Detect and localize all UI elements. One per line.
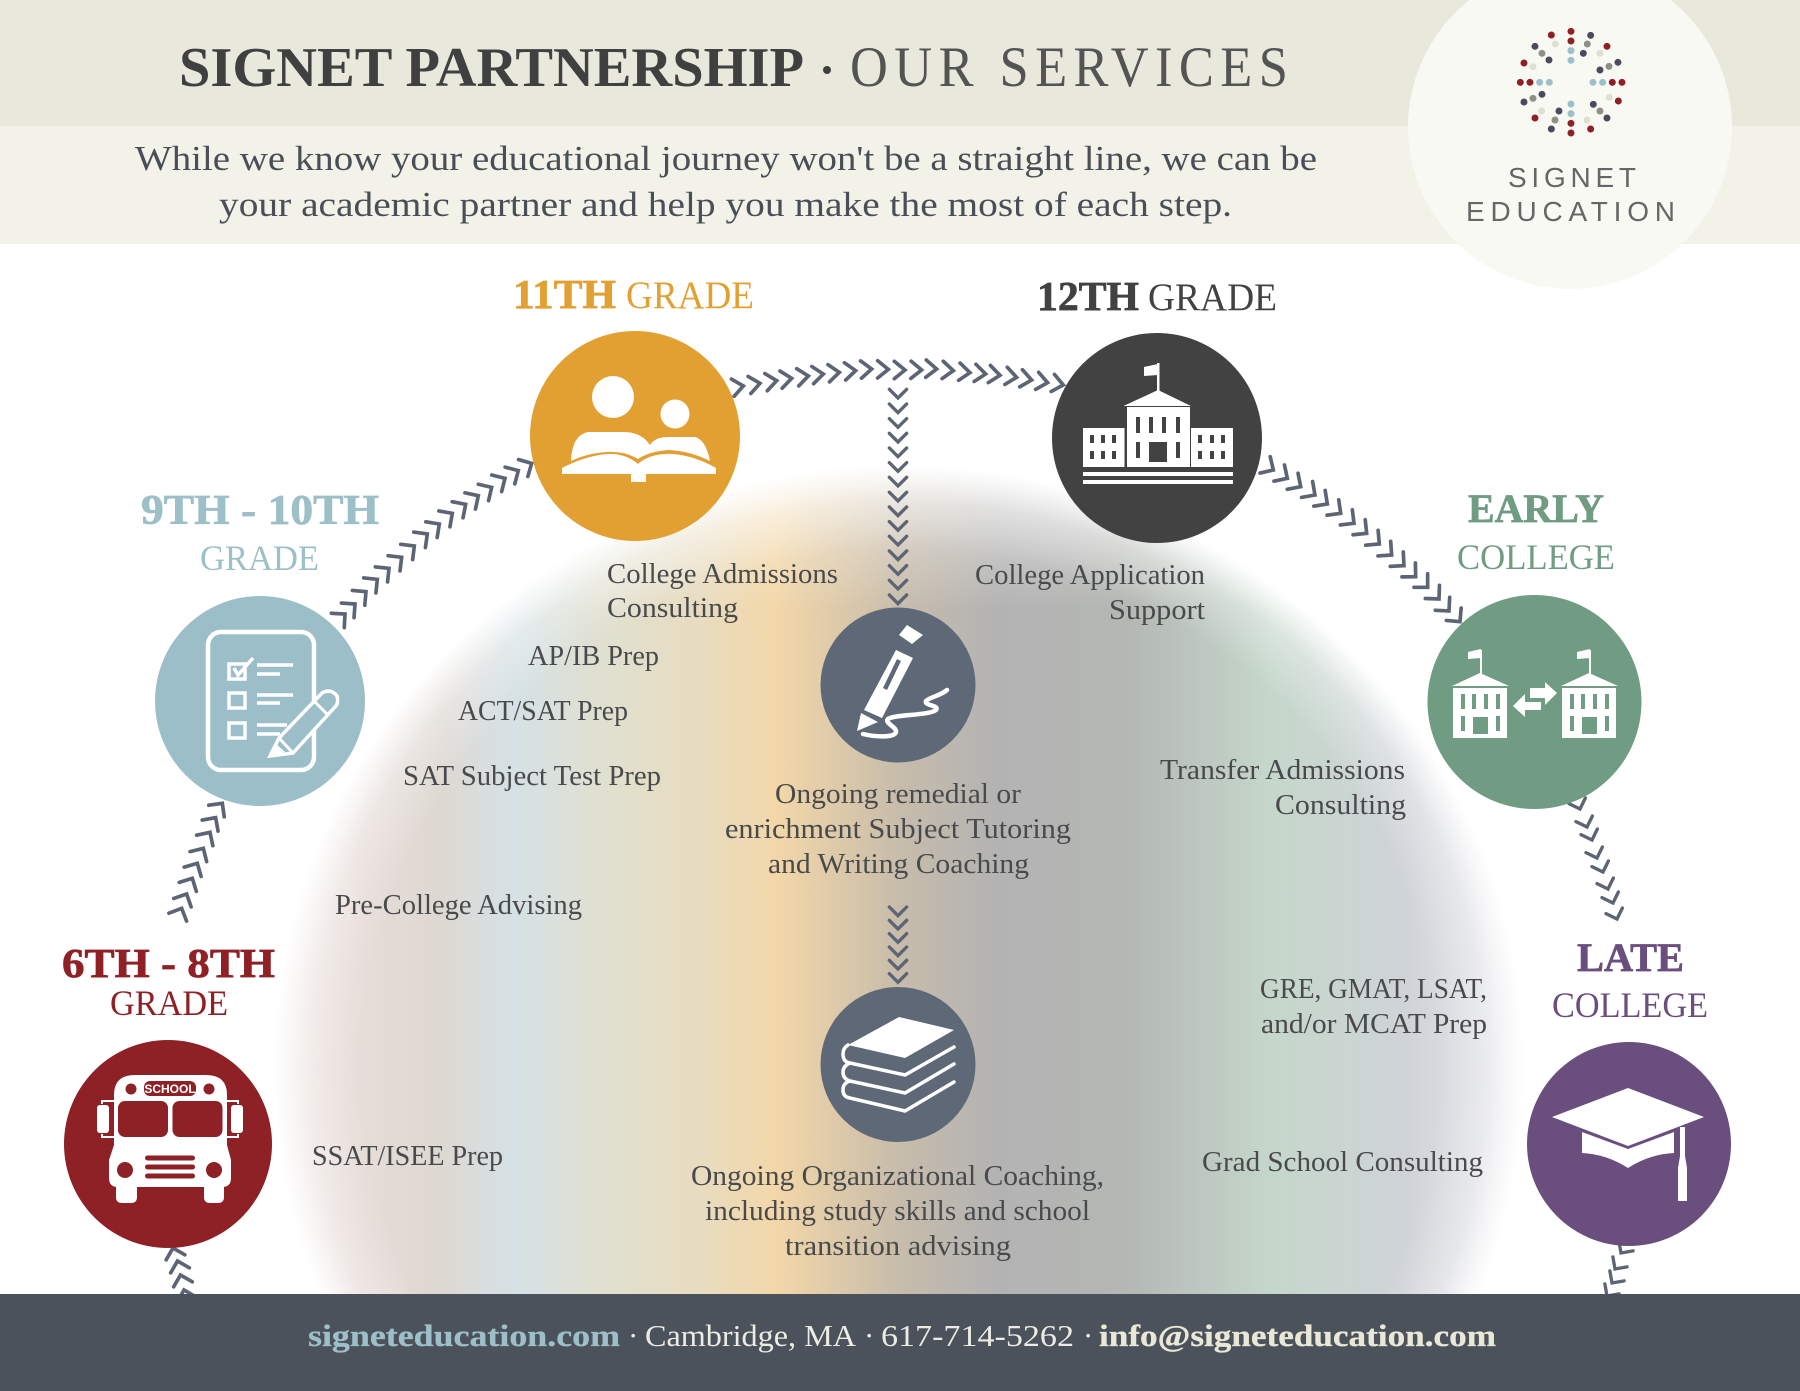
logo dots — [1517, 28, 1625, 136]
heading: early college: COLLEGE — [1457, 537, 1615, 577]
title band — [0, 0, 1800, 126]
icon: school building — [1083, 363, 1233, 484]
circle: early college — [1428, 595, 1642, 809]
label: AP/IB prep: AP/IB Prep — [528, 641, 659, 672]
label: transfer admissions consulting: Consulting — [1275, 790, 1406, 821]
node: 12th grade — [1037, 273, 1277, 543]
subtitle band — [0, 126, 1800, 244]
icon: stack of books — [843, 1017, 954, 1111]
node: early college — [1428, 486, 1642, 809]
heading: 6th-8th grade: GRADE — [110, 983, 228, 1023]
footer contact text: Cambridge, MA — [645, 1318, 857, 1353]
heading: late college: LATE — [1577, 935, 1684, 980]
icon: graduation cap — [1552, 1088, 1704, 1201]
label: SSAT/ISEE prep: SSAT/ISEE Prep — [312, 1141, 503, 1172]
label: graduate test prep: and/or MCAT Prep — [1261, 1009, 1487, 1040]
arrow: 6th-8th to 9th-10th — [169, 798, 230, 921]
icon: readers with open book — [562, 376, 716, 482]
heading: 11th grade: GRADE — [626, 274, 754, 317]
footer contact text: signeteducation.com — [308, 1318, 620, 1353]
text: tutoring: Ongoing remedial or — [775, 779, 1022, 810]
subtitle — [135, 139, 1317, 224]
footer band — [0, 1294, 1800, 1391]
text: organizational coaching: including study skills and school — [705, 1196, 1090, 1227]
heading: late college: COLLEGE — [1552, 985, 1708, 1025]
subtitle: While we know your educational journey won't be a straight line, we can be — [135, 139, 1317, 178]
heading: 11th grade: 11TH — [513, 271, 616, 317]
circle: 11th — [530, 331, 740, 541]
heading: 12th grade — [1037, 273, 1277, 319]
label: graduate test prep: GRE, GMAT, LSAT, — [1260, 974, 1487, 1005]
icon: school bus: SCHOOL — [144, 1082, 196, 1096]
footer contact text: · — [864, 1318, 874, 1353]
arrow: early college to late college — [1569, 798, 1625, 922]
label: college application support: Support — [1109, 595, 1205, 626]
label: transfer admissions consulting: Transfer Admissions — [1160, 755, 1405, 786]
arrow: 9th-10th to 11th — [331, 455, 536, 628]
service labels — [312, 559, 1487, 1178]
label: grad school consulting: Grad School Consulting — [1202, 1147, 1483, 1178]
heading: 12th grade: 12TH — [1037, 273, 1139, 319]
circle: 12th — [1052, 333, 1262, 543]
label: graduate test prep — [1260, 974, 1487, 1040]
heading: early college — [1457, 486, 1615, 577]
heading: 6th-8th grade: 6TH - 8TH — [62, 940, 275, 986]
label: college admissions consulting: College Admissions — [607, 559, 838, 590]
heading: 6th-8th grade — [62, 940, 275, 1023]
label: pre-college advising: Pre-College Advising — [335, 890, 582, 921]
icon: school bus — [97, 1075, 243, 1203]
logo wordmark — [1466, 162, 1675, 227]
heading: 9th-10th grade: 9TH - 10TH — [141, 488, 379, 534]
node: tutoring — [725, 608, 1071, 880]
arrow: 6th-8th to footer edge — [164, 1245, 196, 1302]
icon: checklist and pencil — [208, 632, 338, 770]
node: 9th-10th grade — [141, 488, 379, 806]
label: college admissions consulting: Consulting — [607, 593, 738, 624]
circle: 9th-10th — [155, 596, 365, 806]
text: tutoring: and Writing Coaching — [768, 849, 1029, 880]
circle: tutoring — [820, 608, 976, 762]
footer contact text: · — [628, 1318, 638, 1353]
logo wordmark: SIGNET — [1508, 162, 1636, 193]
text: organizational coaching — [691, 1161, 1104, 1262]
logo wordmark: EDUCATION — [1466, 196, 1675, 227]
icon: transfer between schools — [1452, 649, 1618, 738]
footer contact text: 617-714-5262 — [881, 1318, 1074, 1353]
background rainbow arch — [270, 460, 1528, 1294]
arrow: 11th to 12th — [731, 360, 1065, 396]
title: OUR SERVICES — [850, 35, 1288, 98]
footer contact text: · — [1083, 1318, 1093, 1353]
node: late college — [1527, 935, 1731, 1246]
circle: late college — [1527, 1042, 1731, 1246]
text: tutoring — [725, 779, 1071, 880]
circle: 6th-8th — [64, 1040, 272, 1248]
heading: early college: EARLY — [1468, 486, 1604, 531]
heading: 9th-10th grade — [141, 488, 379, 578]
arrow: late college to footer edge — [1600, 1241, 1633, 1301]
arrow: branch down to tutoring — [889, 389, 907, 604]
node: 6th-8th grade — [62, 940, 275, 1248]
text: organizational coaching: transition advising — [785, 1231, 1011, 1262]
label: ACT/SAT prep: ACT/SAT Prep — [458, 696, 628, 727]
footer contact text — [308, 1318, 1496, 1353]
arrow: tutoring down to organizational coaching — [889, 907, 907, 982]
text: organizational coaching: Ongoing Organizational Coaching, — [691, 1161, 1104, 1192]
title: SIGNET PARTNERSHIP — [179, 37, 804, 99]
circle: organizational coaching — [820, 987, 976, 1142]
node: 11th grade — [513, 271, 754, 541]
text: tutoring: enrichment Subject Tutoring — [725, 814, 1071, 845]
footer — [0, 1294, 1800, 1391]
label: transfer admissions consulting — [1160, 755, 1406, 821]
title — [179, 35, 1288, 99]
label: SAT subject test prep: SAT Subject Test Prep — [403, 761, 661, 792]
logo badge — [1408, 0, 1732, 289]
label: college application support — [975, 560, 1205, 626]
footer contact text: info@signeteducation.com — [1099, 1318, 1496, 1353]
label: college application support: College Application — [975, 560, 1205, 591]
label: college admissions consulting — [607, 559, 838, 624]
subtitle: your academic partner and help you make the most of each step. — [219, 185, 1232, 224]
icon: pencil writing — [857, 625, 947, 736]
heading: 9th-10th grade: GRADE — [200, 538, 319, 578]
heading: 11th grade — [513, 271, 754, 317]
node: organizational coaching — [691, 987, 1104, 1262]
heading: 12th grade: GRADE — [1148, 276, 1277, 319]
header — [0, 0, 1800, 244]
heading: late college — [1552, 935, 1708, 1025]
arrow: 12th to early college — [1260, 457, 1467, 628]
